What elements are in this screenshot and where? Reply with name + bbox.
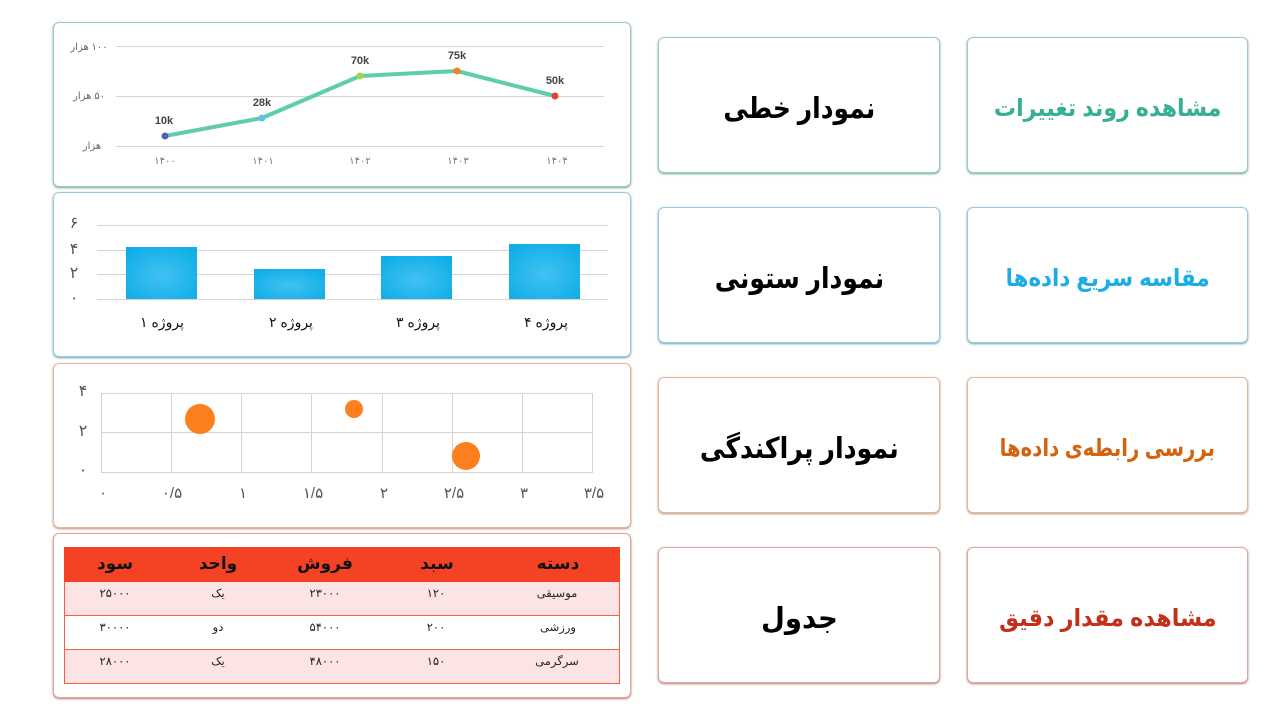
card: table purpose: مشاهده مقدار دقیق: [999, 604, 1216, 632]
data labels: 75k: [448, 50, 467, 62]
table rows: ۲۸۰۰۰: [100, 656, 130, 668]
data labels: [155, 50, 565, 127]
table rows: ۴۸۰۰۰: [310, 656, 340, 668]
category labels: [140, 314, 568, 331]
card: line chart purpose: مشاهده روند تغییرات: [994, 94, 1221, 122]
x axis labels: ۱/۵: [303, 485, 323, 502]
table rows: ۲۰۰: [427, 622, 445, 634]
table rows: ۱۲۰: [427, 588, 445, 600]
x axis labels: ۲/۵: [444, 485, 464, 502]
card: table purpose: [967, 547, 1248, 683]
x axis labels: ۱۴۰۲: [349, 156, 371, 167]
table header: واحد: [199, 554, 237, 574]
y axis labels: ۰: [70, 290, 78, 307]
card: table name: جدول: [761, 602, 837, 634]
card: bar chart name: نمودار ستونی: [714, 262, 884, 294]
y axis labels: [70, 215, 78, 307]
y axis labels: [69, 42, 108, 152]
x axis labels: ۳/۵: [584, 485, 604, 502]
table header: سود: [97, 554, 133, 574]
card: table name: [658, 547, 940, 683]
x axis labels: ۱۴۰۴: [546, 156, 568, 167]
card: line chart name: نمودار خطی: [723, 92, 875, 124]
bars: [126, 244, 580, 299]
table rows: ۲۳۰۰۰: [310, 588, 340, 600]
x axis labels: [99, 485, 604, 502]
table rows: سرگرمی: [535, 654, 579, 669]
data labels: 70k: [351, 55, 370, 67]
y axis labels: هزار: [82, 141, 101, 152]
category labels: پروژه ۱: [140, 314, 184, 331]
table rows: ورزشی: [540, 622, 576, 635]
trend line: [165, 71, 555, 136]
y axis labels: [79, 383, 87, 479]
card: scatter chart name: [658, 377, 940, 513]
data labels: 10k: [155, 115, 174, 127]
table rows: ۳۰۰۰۰: [100, 622, 130, 634]
card: scatter chart name: نمودار پراکندگی: [700, 432, 898, 464]
category labels: پروژه ۳: [396, 314, 440, 331]
y axis labels: ۶: [70, 215, 78, 232]
table header: دسته: [537, 554, 580, 573]
y axis labels: ۴: [79, 383, 87, 400]
y axis labels: ۵۰ هزار: [72, 91, 105, 102]
y axis labels: ۲: [70, 265, 78, 282]
table rows: ۵۴۰۰۰: [310, 622, 340, 634]
y axis labels: ۰: [79, 462, 87, 479]
y axis labels: ۴: [70, 241, 78, 258]
x axis labels: ۱۴۰۱: [252, 156, 274, 167]
table header: [64, 547, 620, 582]
card: bar chart purpose: مقاسه سریع داده‌ها: [1005, 264, 1210, 292]
table rows: دو: [212, 622, 223, 635]
panel: scatter chart: [53, 363, 631, 528]
table rows: ۲۵۰۰۰: [100, 588, 130, 600]
table rows: موسیقی: [537, 588, 577, 601]
card: scatter chart purpose: [967, 377, 1248, 513]
panel: line chart: [53, 22, 631, 187]
x axis labels: ۰: [99, 485, 107, 502]
data points: [162, 68, 558, 140]
table header: فروش: [297, 554, 353, 574]
card: line chart purpose: [967, 37, 1248, 173]
x axis labels: ۱۴۰۳: [447, 156, 469, 167]
x axis labels: ۲: [380, 485, 388, 502]
x axis labels: ۱: [239, 485, 247, 502]
card: bar chart purpose: [967, 207, 1248, 343]
data labels: 28k: [253, 97, 272, 109]
table header: سبد: [420, 554, 454, 573]
table rows: [64, 582, 620, 684]
x axis labels: ۳: [520, 485, 528, 502]
x axis labels: ۱۴۰۰: [154, 156, 176, 167]
x axis labels: ۰/۵: [162, 485, 182, 502]
card: line chart name: [658, 37, 940, 173]
panel: table: [53, 533, 631, 698]
panel: bar chart: [53, 192, 631, 357]
card: bar chart name: [658, 207, 940, 343]
category labels: پروژه ۴: [524, 314, 568, 331]
table rows: ۱۵۰: [427, 656, 445, 668]
category labels: پروژه ۲: [269, 314, 313, 331]
y axis labels: ۱۰۰ هزار: [69, 42, 108, 53]
data labels: 50k: [546, 75, 565, 87]
card: scatter chart purpose: بررسی رابطه‌ی داده‌ها: [1000, 434, 1215, 462]
scatter points: [185, 400, 480, 470]
x axis labels: [154, 156, 568, 167]
table rows: یک: [211, 588, 225, 600]
y axis labels: ۲: [79, 423, 87, 440]
table rows: یک: [211, 656, 225, 668]
